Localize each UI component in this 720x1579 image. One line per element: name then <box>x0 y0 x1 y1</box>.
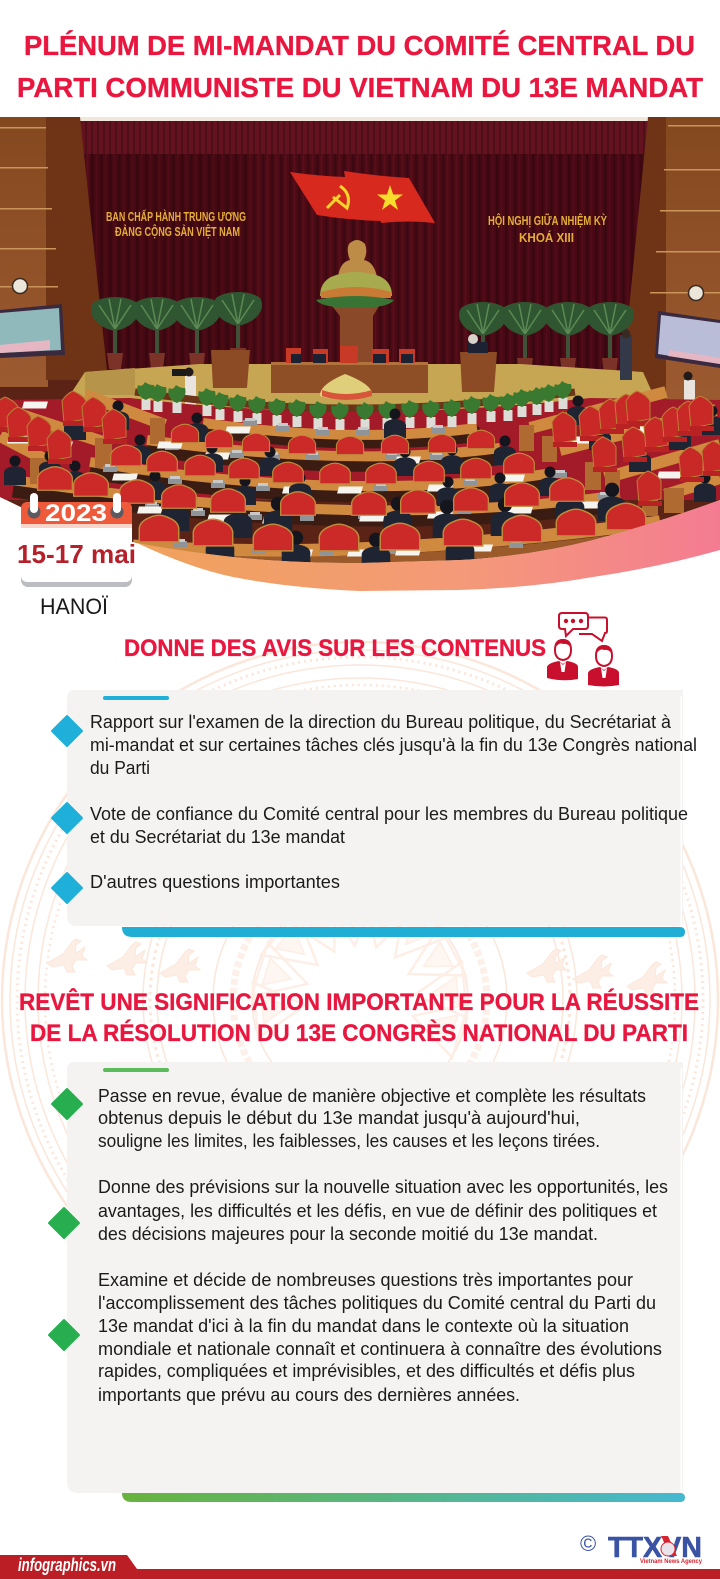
item 2: et du Secrétariat du 13e mandat <box>90 826 345 847</box>
paragraph 1 <box>52 1085 646 1151</box>
paragraph 2 <box>49 1176 668 1244</box>
photo: plenum hall <box>0 117 720 597</box>
item 2: Vote de confiance du Comité central pour les membres du Bureau politique <box>90 803 688 824</box>
banner texts <box>106 209 607 245</box>
paragraph 3 <box>49 1269 662 1405</box>
paragraph 3: mondiale et nationale connaît et continuera à connaître des évolutions <box>98 1338 662 1359</box>
footer bar <box>0 1555 720 1579</box>
floor and desks <box>0 392 720 562</box>
logo: TTXVN: TTXVN <box>608 1532 702 1564</box>
paragraph 2: Donne des prévisions sur la nouvelle situation avec les opportunités, les <box>98 1176 668 1197</box>
item 1: mi-mandat et sur certaines tâches clés jusqu'à la fin du 13e Congrès national <box>90 734 697 755</box>
paragraph 3: 13e mandat d'ici à la fin du mandat dans le contexte où la situation <box>98 1315 629 1336</box>
paragraph 3: importants que prévu au cours des dernières années. <box>98 1384 520 1405</box>
heading: signification: DE LA RÉSOLUTION DU 13E CONGRÈS NATIONAL DU PARTI <box>30 1019 688 1047</box>
background: bronze drum emblem <box>2 642 718 1358</box>
papers and consoles <box>7 402 703 556</box>
paragraph 1: souligne les limites, les faiblesses, les causes et les leçons tirées. <box>98 1130 600 1151</box>
heading: signification <box>19 988 699 1047</box>
heading: donne des avis: DONNE DES AVIS SUR LES CONTENUS <box>124 635 546 662</box>
curtain <box>80 121 650 371</box>
footer bar: infographics.vn <box>18 1555 116 1575</box>
bust and pedestal <box>316 240 394 362</box>
title: PARTI COMMUNISTE DU VIETNAM DU 13E MANDAT <box>17 72 703 103</box>
clocks <box>12 278 704 300</box>
paragraph 1: obtenus depuis le début du 13e mandat jusqu'à aujourd'hui, <box>98 1107 580 1128</box>
item 2 <box>52 803 688 847</box>
title <box>17 30 703 103</box>
screens <box>0 304 720 368</box>
people <box>4 396 720 571</box>
paragraph 3: l'accomplissement des tâches politiques du Comité central du Parti du <box>98 1292 656 1313</box>
calendar: 2023 <box>45 500 107 527</box>
chairs <box>0 391 720 551</box>
stage <box>60 330 695 416</box>
item 1 <box>52 711 697 778</box>
calendar: 15-17 mai <box>17 539 136 569</box>
paragraph 3: rapides, compliquées et imprévisibles, et des difficultés et défis plus <box>98 1360 635 1381</box>
logo: TTXVN: Vietnam News Agency <box>640 1559 703 1565</box>
paragraph 2: des décisions majeures pour la seconde moitié du 13e mandat. <box>98 1223 598 1244</box>
title: PLÉNUM DE MI-MANDAT DU COMITÉ CENTRAL DU <box>24 30 695 61</box>
calendar <box>17 493 136 587</box>
panel: significance <box>49 1062 685 1502</box>
location: Hanoï: HANOÏ <box>40 594 109 619</box>
plants on the stage <box>91 292 634 374</box>
panel: contents <box>52 690 697 937</box>
banner texts: HỘI NGHỊ GIỮA NHIỆM KỲ <box>488 213 607 228</box>
wood walls <box>0 117 720 400</box>
banner texts: BAN CHẤP HÀNH TRUNG ƯƠNG <box>106 209 246 224</box>
banner texts: ĐẢNG CỘNG SẢN VIỆT NAM <box>115 224 240 239</box>
item 1: Rapport sur l'examen de la direction du Bureau politique, du Secrétariat à <box>90 711 672 732</box>
plants on the floor <box>137 381 572 430</box>
item 1: du Parti <box>90 757 150 778</box>
item 3: D'autres questions importantes <box>90 871 340 892</box>
icon: two people talking <box>547 613 619 686</box>
flag <box>290 171 435 223</box>
orange to pink curved band <box>137 500 720 591</box>
paragraph 3: Examine et décide de nombreuses questions très importantes pour <box>98 1269 633 1290</box>
paragraph 2: avantages, les difficultés et les défis, en vue de définir des politiques et <box>98 1200 657 1221</box>
banner texts: KHOÁ XIII <box>519 230 574 245</box>
logo: TTXVN: © <box>580 1531 596 1556</box>
item 3 <box>52 871 340 903</box>
paragraph 1: Passe en revue, évalue de manière objective et complète les résultats <box>98 1085 646 1106</box>
